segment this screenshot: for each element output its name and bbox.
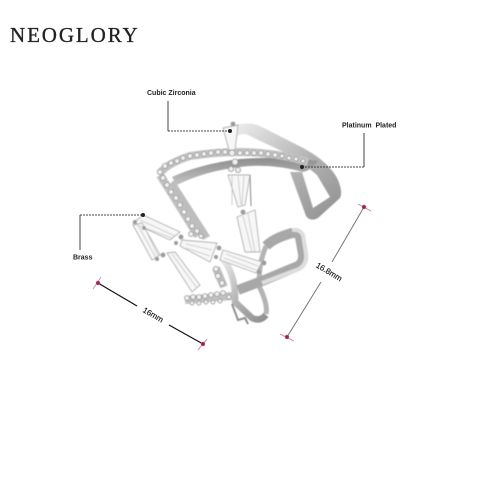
upper loop: [236, 123, 341, 220]
foot tab: [232, 304, 248, 324]
dimension: 16.8mm: 16.8mm: [314, 261, 344, 283]
gem centre: [180, 240, 217, 262]
gem right: [220, 250, 262, 273]
gems: [133, 125, 262, 292]
dimension: 16.8mm: [280, 204, 371, 341]
leader: Brass: [80, 213, 145, 250]
label: Platinum Plated: Platinum Plated: [342, 122, 396, 130]
dimension: 16mm: 16mm: [141, 306, 165, 325]
left diagonal silver edge: [168, 180, 210, 240]
title: NEOGLORY: [10, 23, 140, 47]
lower loop strand A: [259, 246, 266, 314]
lower loop highlight: [262, 230, 306, 283]
pave backing: [160, 152, 308, 300]
prongs: [133, 122, 266, 274]
dimension: 16mm: [93, 277, 207, 350]
gem left: [133, 223, 160, 260]
upper band underside: [172, 158, 318, 185]
label: Brass: Brass: [73, 254, 93, 262]
pave stones: [157, 150, 305, 305]
gem facets: [137, 176, 258, 288]
lower loop strand B: [238, 233, 303, 290]
gem left top: [133, 215, 180, 240]
gem mid: [228, 175, 250, 207]
lower band foot: [222, 258, 266, 319]
leader: Platinum Plated: [300, 133, 364, 169]
gem left bottom: [167, 252, 200, 292]
gem lower: [237, 210, 260, 252]
label: Cubic Zirconia: Cubic Zirconia: [147, 90, 196, 97]
gem top: [223, 125, 238, 150]
thin wire: [250, 175, 251, 206]
ring: [133, 122, 341, 324]
leader: Cubic Zirconia: [168, 101, 232, 133]
